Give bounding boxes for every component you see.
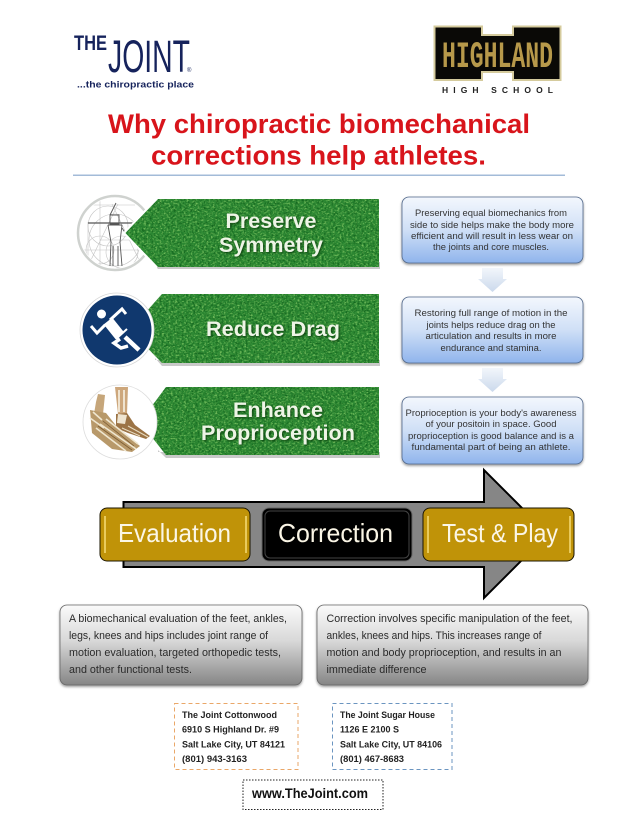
panel: proprioception explanation: of your positoin in space. Good (426, 419, 556, 430)
address: The Joint Sugar House (332, 704, 452, 770)
panel: proprioception explanation: fundamental part of being an athlete. (412, 442, 570, 453)
logo: The Joint: JOINT (108, 31, 190, 82)
icon: vitruvian man (78, 196, 152, 270)
logo: The Joint: ® (187, 67, 192, 74)
panel: symmetry explanation: Preserving equal biomechanics from (415, 208, 567, 219)
step: Correction (262, 508, 412, 561)
step: Evaluation: Evaluation (118, 518, 231, 548)
panel: correction description: ankles, knees and hips. This increases range of (326, 630, 542, 642)
website box (243, 780, 383, 810)
label: Enhance Proprioception: Enhance (233, 399, 323, 422)
panel: drag explanation: articulation and results in more (426, 331, 556, 342)
logo: Highland High School: HIGHLAND (442, 37, 553, 79)
panel: correction description (317, 605, 588, 685)
step: Evaluation (100, 508, 250, 561)
arrow: process arrow (124, 470, 548, 598)
panel: drag explanation: joints helps reduce drag on the (426, 320, 556, 331)
address: The Joint Cottonwood: Salt Lake City, UT 84121 (182, 740, 285, 750)
panel: drag explanation: Restoring full range of motion in the (414, 308, 568, 319)
step: Correction: Correction (278, 518, 393, 548)
title: corrections help athletes. (151, 140, 486, 170)
label: Enhance Proprioception (201, 399, 355, 445)
panel: symmetry explanation: side to side helps make the body more (410, 220, 574, 231)
icon: foot bones (83, 385, 157, 459)
icon: runner (80, 293, 154, 367)
panel: correction description: Correction involves specific manipulation of the feet, (326, 613, 572, 625)
panel: correction description: motion and body proprioception, and results in an (326, 647, 562, 659)
panel: symmetry explanation (402, 197, 583, 263)
step: Test & Play (423, 508, 574, 561)
address: The Joint Sugar House: Salt Lake City, UT 84106 (340, 740, 442, 750)
logo: The Joint: ...the chiropractic place (77, 80, 194, 90)
address: The Joint Cottonwood (174, 704, 298, 770)
address: The Joint Cottonwood: (801) 943-3163 (182, 754, 247, 764)
logo: The Joint (74, 31, 194, 90)
panel: correction description: immediate difference (326, 664, 427, 676)
label: Preserve Symmetry: Symmetry (219, 234, 323, 257)
logo: Highland High School (434, 26, 560, 95)
title: Why chiropractic biomechanical (108, 109, 530, 139)
label: Preserve Symmetry: Preserve (226, 210, 316, 233)
panel: evaluation description: motion evaluation, targeted orthopedic tests, (69, 647, 281, 659)
panel: evaluation description (60, 605, 302, 685)
address: The Joint Cottonwood: The Joint Cottonwood (182, 710, 277, 720)
address: The Joint Sugar House: (801) 467-8683 (340, 754, 404, 764)
label: Reduce Drag: Reduce Drag (206, 318, 340, 341)
panel: symmetry explanation: efficient and will result in less wear on (411, 231, 573, 242)
label: Enhance Proprioception: Proprioception (201, 422, 355, 445)
panel: enhance proprioception (83, 385, 380, 459)
panel: evaluation description: and other functional tests. (69, 664, 192, 676)
panel: symmetry explanation: the joints and core muscles. (433, 242, 549, 253)
logo: Highland High School: HIGH SCHOOL (442, 85, 553, 95)
arrow: down chevron 1 (478, 268, 507, 292)
panel: evaluation description: legs, knees and hips includes joint range of (69, 630, 268, 642)
step: Test & Play: Test & Play (442, 518, 558, 548)
panel: evaluation description: A biomechanical evaluation of the feet, ankles, (69, 613, 287, 625)
address: The Joint Sugar House: The Joint Sugar House (340, 710, 435, 720)
panel: reduce drag (80, 293, 380, 367)
address: The Joint Sugar House: 1126 E 2100 S (340, 724, 399, 734)
panel: preserve symmetry (78, 196, 380, 270)
panel: drag explanation: endurance and stamina. (440, 343, 542, 354)
title (108, 109, 530, 170)
address: The Joint Cottonwood: 6910 S Highland Dr. #9 (182, 724, 279, 734)
label: Preserve Symmetry (219, 210, 323, 257)
panel: proprioception explanation: proprioception is good balance and is a (408, 431, 575, 442)
website box: www.TheJoint.com (251, 785, 368, 801)
panel: drag explanation (402, 297, 583, 363)
logo: The Joint: THE (74, 32, 107, 55)
panel: proprioception explanation: Proprioception is your body's awareness (406, 408, 577, 419)
arrow: down chevron 2 (478, 368, 507, 392)
panel: proprioception explanation (402, 397, 583, 464)
